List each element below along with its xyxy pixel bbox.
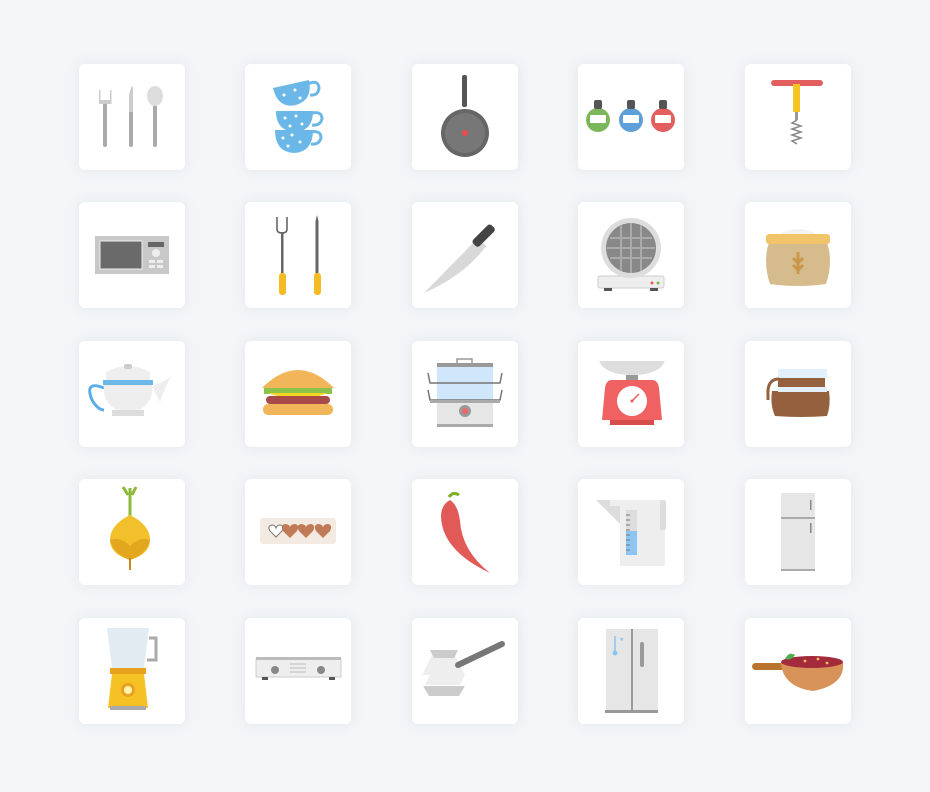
icon: chili pepper — [441, 493, 490, 573]
icon: measuring jug — [596, 500, 666, 566]
icon: stacked cups — [273, 80, 322, 153]
icon: steamer — [428, 359, 502, 427]
icon: double door fridge — [605, 629, 658, 713]
icon: waffle maker — [598, 218, 664, 291]
icon: spice jars — [586, 100, 675, 132]
icon: turkish coffee pot — [422, 644, 502, 696]
icon: electric stove — [256, 657, 341, 680]
icon: kitchen scale — [599, 361, 665, 425]
icon: teapot — [90, 364, 172, 416]
icon: sauce pan with food — [752, 654, 843, 691]
icon: coffee pot — [768, 369, 830, 417]
icon: blender — [107, 628, 156, 710]
icon: fridge — [781, 493, 815, 571]
icon: chef knife — [424, 223, 496, 293]
icon: burger — [262, 370, 334, 415]
icon: onion — [110, 487, 150, 570]
icon: cutlery — [99, 86, 163, 147]
icon: cookies tray — [260, 518, 336, 544]
icon: double door fridge: * — [620, 636, 624, 646]
icon: microwave — [95, 236, 169, 274]
icon: bbq fork and skewer — [277, 215, 321, 295]
icon: corkscrew — [771, 80, 823, 144]
icon: flour sack — [766, 229, 830, 286]
icon: frying pan — [441, 75, 489, 157]
